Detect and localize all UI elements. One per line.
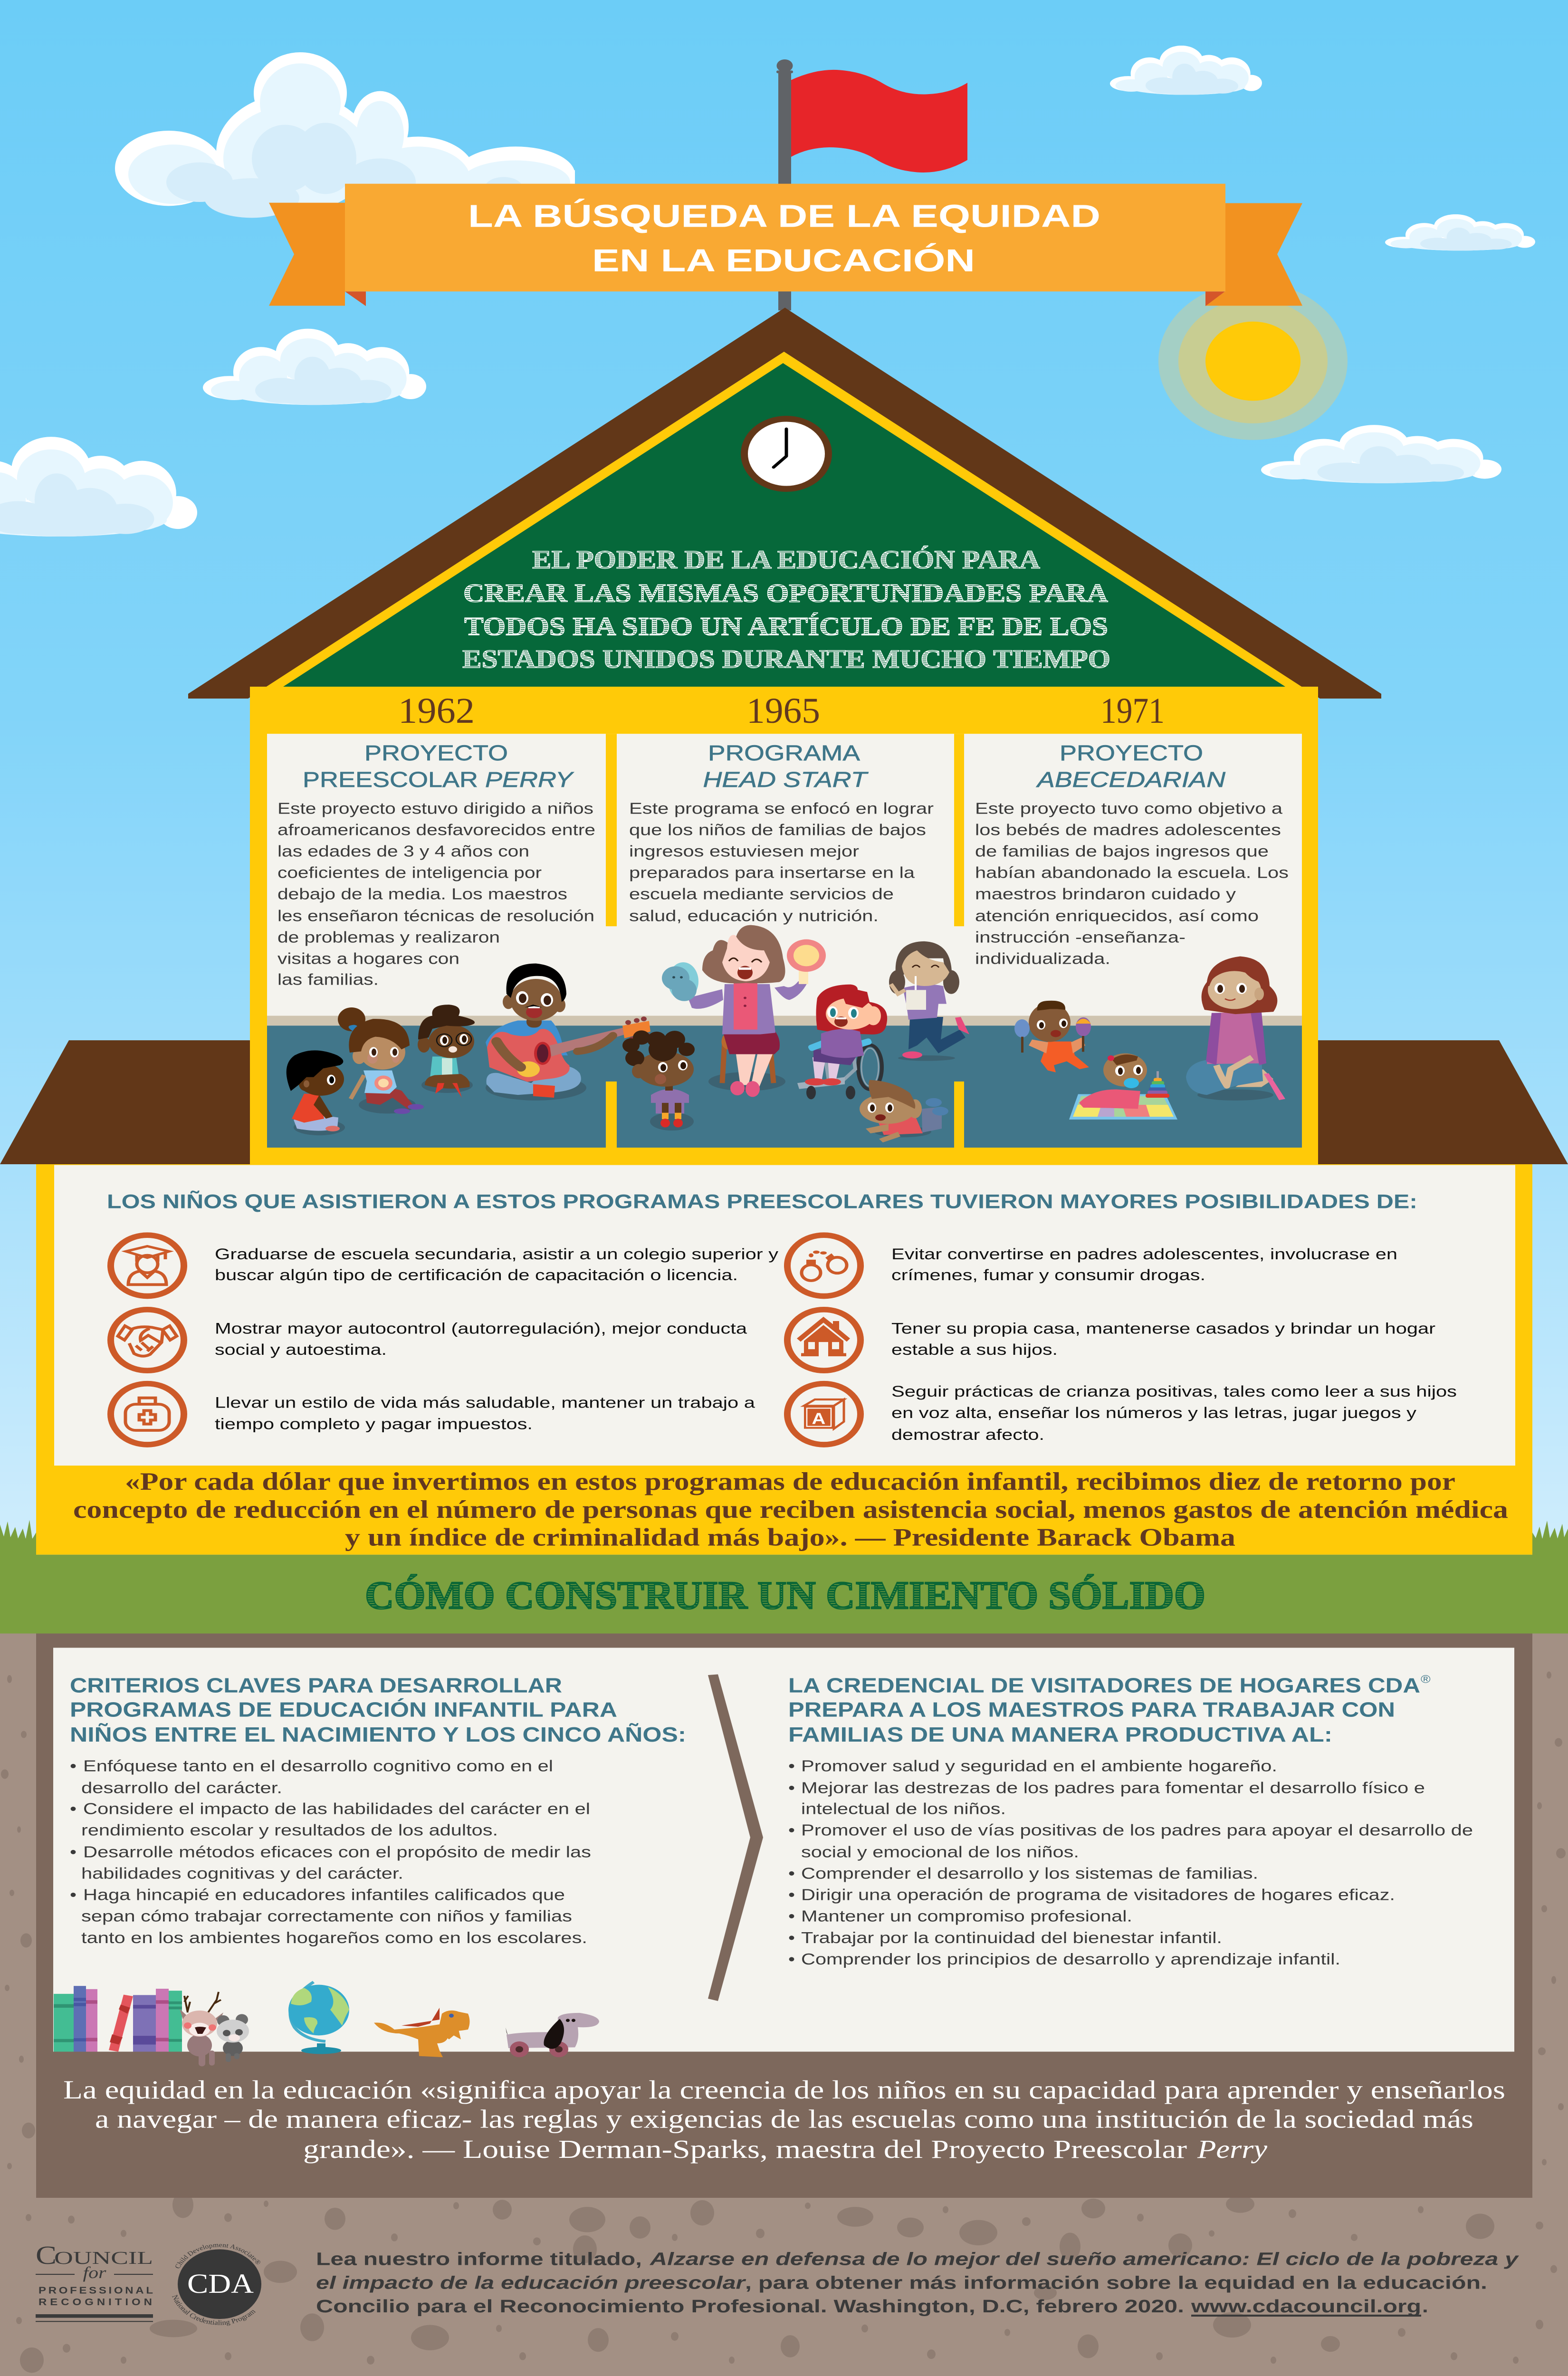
credential list: Mantener un compromiso profesional. bbox=[801, 1907, 1132, 1925]
child in wheelchair bbox=[797, 985, 887, 1099]
credential heading: LA CREDENCIAL DE VISITADORES DE HOGARES CDA bbox=[788, 1675, 1420, 1697]
baby girl on play mat bbox=[1069, 1054, 1177, 1120]
credential list: • bbox=[788, 1779, 795, 1797]
benefits list left bbox=[215, 1245, 778, 1433]
footer citation: . bbox=[1422, 2296, 1428, 2316]
criteria list: rendimiento escolar y resultados de los adultos. bbox=[81, 1821, 498, 1839]
logo: Council for Professional Recognition: OUNCIL bbox=[54, 2248, 153, 2268]
credential heading: ® bbox=[1421, 1674, 1431, 1686]
cloud: large top left bbox=[115, 52, 575, 218]
logo: CDA seal: National Credentialing Program bbox=[170, 2294, 258, 2327]
quote: Obama: y un índice de criminalidad más bajo». — Presidente Barack Obama bbox=[345, 1523, 1235, 1551]
panel: Head Start text: preparados para insertarse en la bbox=[629, 864, 915, 881]
credential list bbox=[788, 1757, 1473, 1968]
child: girl in purple sitting bbox=[622, 1030, 695, 1131]
credential list: Trabajar por la continuidad del bienestar infantil. bbox=[801, 1929, 1222, 1946]
panel: Head Start text: salud, educación y nutrición. bbox=[629, 907, 879, 925]
criteria heading: NIÑOS ENTRE EL NACIMIENTO Y LOS CINCO AÑOS: bbox=[70, 1723, 686, 1746]
credential heading bbox=[788, 1674, 1431, 1746]
credential list: Comprender los principios de desarrollo y aprendizaje infantil. bbox=[801, 1950, 1340, 1968]
logo: CDA seal: Child Development Associate® bbox=[173, 2242, 262, 2270]
benefits heading: LOS NIÑOS QUE ASISTIERON A ESTOS PROGRAMAS PREESCOLARES TUVIERON MAYORES POSIBILIDADES DE: bbox=[107, 1190, 1417, 1213]
criteria list: • bbox=[70, 1886, 76, 1904]
panel: Abecedarian text: ABECEDARIAN bbox=[1036, 767, 1225, 792]
panel: foundation criteria bbox=[53, 1648, 1514, 2052]
title bbox=[468, 198, 1100, 278]
footer citation: el impacto de la educación preescolar bbox=[316, 2272, 746, 2293]
soil speckles bbox=[1, 1672, 1566, 2373]
sky background bbox=[0, 0, 1568, 1584]
footer citation: , para obtener más información sobre la equidad en la educación. bbox=[745, 2272, 1487, 2293]
benefits list right bbox=[891, 1245, 1457, 1443]
man playing guitar bbox=[486, 964, 650, 1101]
panel: Perry text: PROYECTO bbox=[364, 741, 508, 765]
benefits list right: Evitar convertirse en padres adolescentes, involucrase en bbox=[891, 1245, 1397, 1263]
quote: Derman-Sparks: Perry bbox=[1197, 2135, 1267, 2164]
section heading: foundation: CÓMO CONSTRUIR UN CIMIENTO SÓLIDO bbox=[365, 1573, 1205, 1617]
panel: Perry text: visitas a hogares con bbox=[277, 949, 459, 968]
logo: Council for Professional Recognition: RECOGNITION bbox=[38, 2297, 152, 2307]
cloud: top right bbox=[1110, 46, 1262, 95]
baby boy crawling bbox=[860, 1080, 948, 1142]
roof statement: TODOS HA SIDO UN ARTÍCULO DE FE DE LOS bbox=[464, 613, 1108, 641]
benefits list left: social y autoestima. bbox=[215, 1341, 387, 1358]
credential list: intelectual de los niños. bbox=[801, 1800, 1006, 1818]
yellow benefits frame bbox=[36, 1164, 1532, 1555]
flag and pole bbox=[776, 59, 967, 310]
criteria heading: PROGRAMAS DE EDUCACIÓN INFANTIL PARA bbox=[70, 1698, 617, 1721]
roof statement bbox=[462, 546, 1110, 674]
criteria list: tanto en los ambientes hogareños como en los escolares. bbox=[81, 1929, 587, 1946]
icon: house bbox=[787, 1310, 860, 1370]
logo: CDA seal: CDA bbox=[187, 2268, 254, 2299]
panel: benefits bbox=[54, 1165, 1515, 1466]
panel: Perry text: las familias. bbox=[277, 971, 379, 988]
child: boy in red shirt bbox=[287, 1050, 345, 1135]
roof statement: CREAR LAS MISMAS OPORTUNIDADES PARA bbox=[463, 579, 1108, 608]
criteria list: Haga hincapié en educadores infantiles calificados que bbox=[83, 1886, 565, 1904]
quote: Obama bbox=[73, 1467, 1508, 1551]
benefits list right: en voz alta, enseñar los números y las letras, jugar juegos y bbox=[891, 1404, 1416, 1421]
benefits list left: Graduarse de escuela secundaria, asistir a un colegio superior y bbox=[215, 1245, 778, 1263]
credential list: • bbox=[788, 1821, 795, 1839]
quote: Derman-Sparks: grande». — Louise Derman-Sparks, maestra del Proyecto Preescolar bbox=[303, 2135, 1187, 2164]
panel: Head Start text: que los niños de familias de bajos bbox=[629, 821, 926, 839]
quote: Obama: concepto de reducción en el número de personas que reciben asistencia social, menos gastos de atención médica bbox=[73, 1495, 1508, 1523]
toy dinosaur bbox=[374, 2008, 469, 2057]
credential list: Promover el uso de vías positivas de los padres para apoyar el desarrollo de bbox=[801, 1821, 1473, 1839]
teacher with puppets bbox=[662, 925, 826, 1097]
year 1965: 1965 bbox=[746, 691, 820, 731]
icon: medical kit bbox=[111, 1384, 184, 1445]
footer citation: www.cdacouncil.org bbox=[1191, 2296, 1421, 2316]
benefits list right: Seguir prácticas de crianza positivas, tales como leer a sus hijos bbox=[891, 1383, 1457, 1400]
benefits list right: demostrar afecto. bbox=[891, 1426, 1044, 1443]
panel: Perry text bbox=[277, 741, 595, 988]
school roof bbox=[188, 308, 1381, 713]
icon: alphabet block bbox=[787, 1384, 860, 1445]
panel: Abecedarian text: de familias de bajos ingresos que bbox=[975, 843, 1269, 860]
panel: Abecedarian text: maestros brindaron cuidado y bbox=[975, 885, 1236, 903]
panel: Head Start text: escuela mediante servicios de bbox=[629, 885, 894, 903]
child: girl with hair bun bbox=[338, 1007, 424, 1114]
panel: Abecedarian text: Este proyecto tuvo como objetivo a bbox=[975, 800, 1283, 817]
sun bbox=[1158, 282, 1348, 440]
criteria list: habilidades cognitivas y del carácter. bbox=[81, 1864, 403, 1882]
panel: Perry text: coeficientes de inteligencia por bbox=[277, 864, 542, 881]
quote: Derman-Sparks: a navegar – de manera eficaz- las reglas y exigencias de las escuelas como una institución de la sociedad más bbox=[95, 2105, 1473, 2134]
grass band bbox=[0, 1520, 1568, 1634]
panel: Head Start text: ingresos estuviesen mejor bbox=[629, 843, 859, 860]
panel: Abecedarian text: instrucción -enseñanza- bbox=[975, 928, 1186, 946]
criteria list: Desarrolle métodos eficaces con el propósito de medir las bbox=[83, 1843, 591, 1861]
criteria list bbox=[70, 1757, 591, 1946]
criteria list: Considere el impacto de las habilidades del carácter en el bbox=[83, 1800, 590, 1818]
quote: Derman-Sparks bbox=[63, 2076, 1505, 2164]
criteria list: • bbox=[70, 1843, 76, 1861]
icon: alphabet block: A bbox=[812, 1410, 825, 1428]
panel: Abecedarian text: habían abandonado la escuela. Los bbox=[975, 864, 1289, 881]
benefits list left: Mostrar mayor autocontrol (autorregulación), mejor conducta bbox=[215, 1320, 747, 1337]
title: LA BÚSQUEDA DE LA EQUIDAD bbox=[468, 198, 1100, 234]
credential list: Comprender el desarrollo y los sistemas de familias. bbox=[801, 1864, 1258, 1882]
logo: CDA seal bbox=[170, 2242, 267, 2327]
toy dog on wheels bbox=[506, 2013, 599, 2057]
panel: Perry text: debajo de la media. Los maestros bbox=[277, 885, 567, 903]
credential heading: PREPARA A LOS MAESTROS PARA TRABAJAR CON bbox=[788, 1698, 1395, 1721]
year 1971: 1971 bbox=[1100, 691, 1165, 731]
panel: Perry text: de problemas y realizaron bbox=[277, 928, 500, 946]
title: EN LA EDUCACIÓN bbox=[592, 242, 975, 278]
logo: Council for Professional Recognition bbox=[36, 2241, 153, 2322]
credential list: • bbox=[788, 1950, 795, 1968]
panel: Perry text: Este proyecto estuvo dirigido a niños bbox=[277, 800, 593, 817]
footer citation: Lea nuestro informe titulado, bbox=[316, 2249, 642, 2269]
lower left roof bbox=[0, 1040, 266, 1164]
credential list: Promover salud y seguridad en el ambiente hogareño. bbox=[801, 1757, 1277, 1775]
roof statement: ESTADOS UNIDOS DURANTE MUCHO TIEMPO bbox=[462, 645, 1110, 674]
cloud: middle left bbox=[203, 329, 426, 405]
panel: Abecedarian text: atención enriquecidos, así como bbox=[975, 907, 1259, 925]
year 1962: 1962 bbox=[398, 691, 475, 731]
seated woman bbox=[1186, 956, 1285, 1101]
icon: handcuffs bbox=[787, 1235, 860, 1296]
panel: Abecedarian text bbox=[975, 741, 1289, 968]
globe bbox=[288, 1982, 349, 2054]
panel: Abecedarian text: los bebés de madres adolescentes bbox=[975, 821, 1281, 839]
credential list: • bbox=[788, 1864, 795, 1882]
criteria heading: CRITERIOS CLAVES PARA DESARROLLAR bbox=[70, 1675, 562, 1697]
panel: Perry text: les enseñaron técnicas de resolución bbox=[277, 907, 594, 925]
toy deer bbox=[180, 1992, 223, 2066]
chevron arrow bbox=[708, 1674, 763, 2001]
credential list: social y emocional de los niños. bbox=[801, 1843, 1079, 1861]
quote: Obama: «Por cada dólar que invertimos en estos programas de educación infantil, recibimos diez de retorno por bbox=[125, 1467, 1455, 1495]
baby with maracas bbox=[1014, 1001, 1091, 1073]
benefits list left: Llevar un estilo de vida más saludable, mantener un trabajo a bbox=[215, 1394, 755, 1411]
school wall bbox=[250, 687, 1318, 1164]
books bbox=[54, 1986, 182, 2052]
credential list: Mejorar las destrezas de los padres para fomentar el desarrollo físico e bbox=[801, 1779, 1425, 1797]
toy panda bbox=[217, 2014, 249, 2062]
credential list: • bbox=[788, 1757, 795, 1775]
icon: graduate bbox=[111, 1235, 184, 1296]
footer citation bbox=[316, 2249, 1520, 2317]
benefits list left: buscar algún tipo de certificación de capacitación o licencia. bbox=[215, 1266, 738, 1284]
lower right roof bbox=[1302, 1040, 1568, 1164]
panel: Perry text: las edades de 3 y 4 años con bbox=[277, 843, 529, 860]
panel: Head Start text bbox=[629, 741, 934, 925]
benefits list right: estable a sus hijos. bbox=[891, 1341, 1058, 1358]
benefits list right: crímenes, fumar y consumir drogas. bbox=[891, 1266, 1205, 1284]
panel: Head Start text: Este programa se enfocó en lograr bbox=[629, 800, 934, 817]
roof statement: EL PODER DE LA EDUCACIÓN PARA bbox=[532, 546, 1040, 575]
panel: Perry text: PREESCOLAR PERRY bbox=[303, 767, 574, 792]
cloud: left edge bbox=[0, 437, 197, 537]
roof base strip bbox=[250, 1148, 1318, 1164]
logo: Council for Professional Recognition: for bbox=[83, 2264, 107, 2282]
panel: Head Start text: HEAD START bbox=[703, 767, 869, 792]
criteria list: • bbox=[70, 1800, 76, 1818]
footer citation: Alzarse en defensa de lo mejor del sueño americano: El ciclo de la pobreza y bbox=[650, 2249, 1520, 2269]
child drinking milk bbox=[889, 941, 969, 1061]
foundation frame bbox=[36, 1634, 1532, 2198]
title banner bbox=[269, 184, 1302, 306]
logo: Council for Professional Recognition: PROFESSIONAL bbox=[38, 2285, 153, 2296]
icon: handshake bbox=[111, 1310, 184, 1370]
credential heading: FAMILIAS DE UNA MANERA PRODUCTIVA AL: bbox=[788, 1724, 1332, 1746]
credential list: • bbox=[788, 1907, 795, 1925]
benefits list right: Tener su propia casa, mantenerse casados y brindar un hogar bbox=[891, 1320, 1435, 1337]
panel: Head Start text: PROGRAMA bbox=[708, 741, 860, 765]
panel: Perry text: afroamericanos desfavorecidos entre bbox=[277, 821, 595, 839]
credential list: • bbox=[788, 1929, 795, 1946]
clock bbox=[741, 416, 832, 492]
soil ground bbox=[0, 1634, 1568, 2376]
cloud: small right bbox=[1385, 214, 1535, 250]
panel: Abecedarian text: individualizada. bbox=[975, 949, 1110, 968]
quote: Derman-Sparks: La equidad en la educación «significa apoyar la creencia de los niños en su capacidad para aprender y enseñarlos bbox=[63, 2076, 1505, 2105]
child: boy with glasses bbox=[418, 1005, 475, 1098]
credential list: Dirigir una operación de programa de visitadores de hogares eficaz. bbox=[801, 1886, 1395, 1904]
criteria list: Enfóquese tanto en el desarrollo cognitivo como en el bbox=[83, 1757, 553, 1775]
criteria list: • bbox=[70, 1757, 76, 1775]
criteria list: sepan cómo trabajar correctamente con niños y familias bbox=[81, 1907, 572, 1925]
criteria list: desarrollo del carácter. bbox=[81, 1779, 282, 1797]
footer citation: Concilio para el Reconocimiento Profesional. Washington, D.C, febrero 2020. bbox=[316, 2296, 1184, 2316]
criteria heading bbox=[70, 1675, 686, 1746]
benefits list left: tiempo completo y pagar impuestos. bbox=[215, 1416, 533, 1433]
credential list: • bbox=[788, 1886, 795, 1904]
panel: Abecedarian text: PROYECTO bbox=[1060, 741, 1203, 765]
cloud: right lower bbox=[1261, 425, 1501, 483]
logo: Council for Professional Recognition: C bbox=[36, 2241, 57, 2270]
programme panels bbox=[267, 734, 1302, 1148]
